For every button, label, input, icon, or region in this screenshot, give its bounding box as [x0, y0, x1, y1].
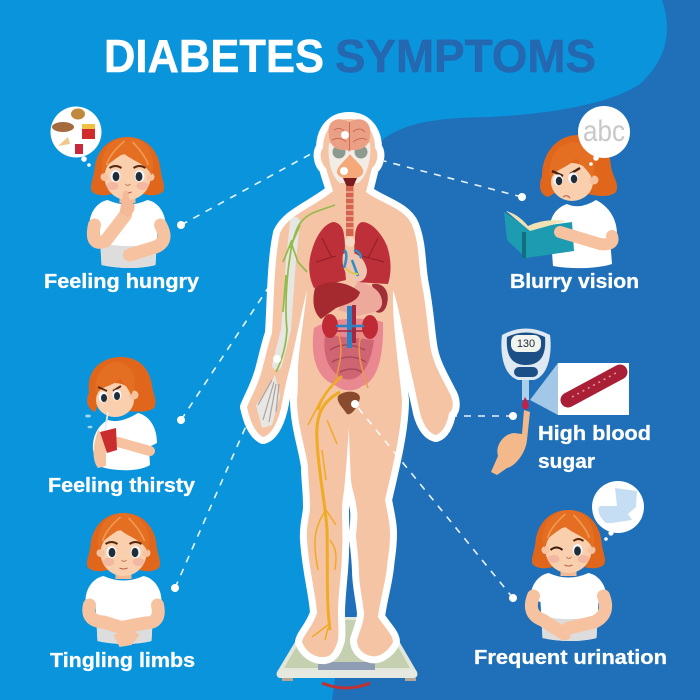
symptom: feeling hungry — [50, 106, 166, 268]
hair — [87, 357, 156, 412]
skull — [329, 143, 370, 183]
symptom: high blood sugar — [491, 328, 651, 475]
callout: blood vessel — [558, 363, 629, 415]
title — [104, 30, 596, 82]
girl: frequent urination — [530, 510, 606, 641]
callout: magnifier wedge — [530, 363, 558, 415]
symptom: feeling thirsty — [85, 357, 157, 470]
skeleton arm and green nerves — [256, 205, 335, 428]
label: high blood sugar: sugar — [538, 451, 595, 473]
title: DIABETES — [104, 30, 324, 82]
girl: reading — [540, 135, 617, 268]
face — [96, 383, 134, 417]
dot: feeling thirsty — [177, 416, 185, 424]
brain — [328, 119, 370, 152]
lungs — [309, 222, 391, 288]
label: blurry vision: Blurry vision — [510, 271, 639, 293]
connector: frequent urination — [355, 404, 513, 598]
kidneys and vessels — [322, 305, 378, 388]
label: tingling limbs: Tingling limbs — [50, 650, 195, 672]
arm and hand — [560, 232, 612, 244]
straw and cup — [105, 412, 108, 430]
dot: blurry vision — [518, 193, 526, 201]
symptom: tingling limbs — [86, 513, 162, 647]
symptom: frequent urination — [530, 481, 644, 641]
blood drop — [522, 397, 529, 410]
title: SYMPTOMS — [335, 30, 596, 82]
book — [504, 211, 574, 258]
thought bubble: abc: abc — [583, 115, 625, 148]
water drops — [85, 414, 91, 418]
dashed connector lines — [175, 150, 522, 588]
stomach — [338, 282, 382, 316]
girl: hungry — [90, 137, 166, 268]
liver — [313, 282, 360, 319]
label: frequent urination: Frequent urination — [474, 647, 667, 669]
dot: frequent urination — [509, 594, 517, 602]
thought bubble: food — [50, 106, 102, 167]
dot: tingling limbs — [171, 584, 179, 592]
glucose meter — [501, 328, 551, 400]
bladder and leg nerves — [308, 376, 360, 640]
thought bubble: toilet — [592, 481, 644, 541]
label: high blood sugar: High blood — [538, 423, 651, 445]
symptom: blurry vision — [504, 106, 630, 268]
body marker dots — [273, 131, 359, 408]
intestines — [313, 319, 383, 390]
spleen — [372, 284, 388, 313]
label: feeling hungry: Feeling hungry — [44, 271, 200, 293]
body silhouette — [247, 119, 453, 657]
glucose meter: 130 — [517, 338, 535, 350]
label: feeling thirsty: Feeling thirsty — [48, 475, 196, 497]
trachea — [343, 178, 357, 236]
thought bubble: abc — [578, 106, 630, 166]
shirt and arms — [93, 413, 157, 470]
scale — [277, 617, 417, 688]
dot: high blood sugar — [509, 412, 517, 420]
hand: pointing finger — [491, 410, 530, 475]
heart — [343, 250, 367, 282]
dot: feeling hungry — [177, 221, 185, 229]
